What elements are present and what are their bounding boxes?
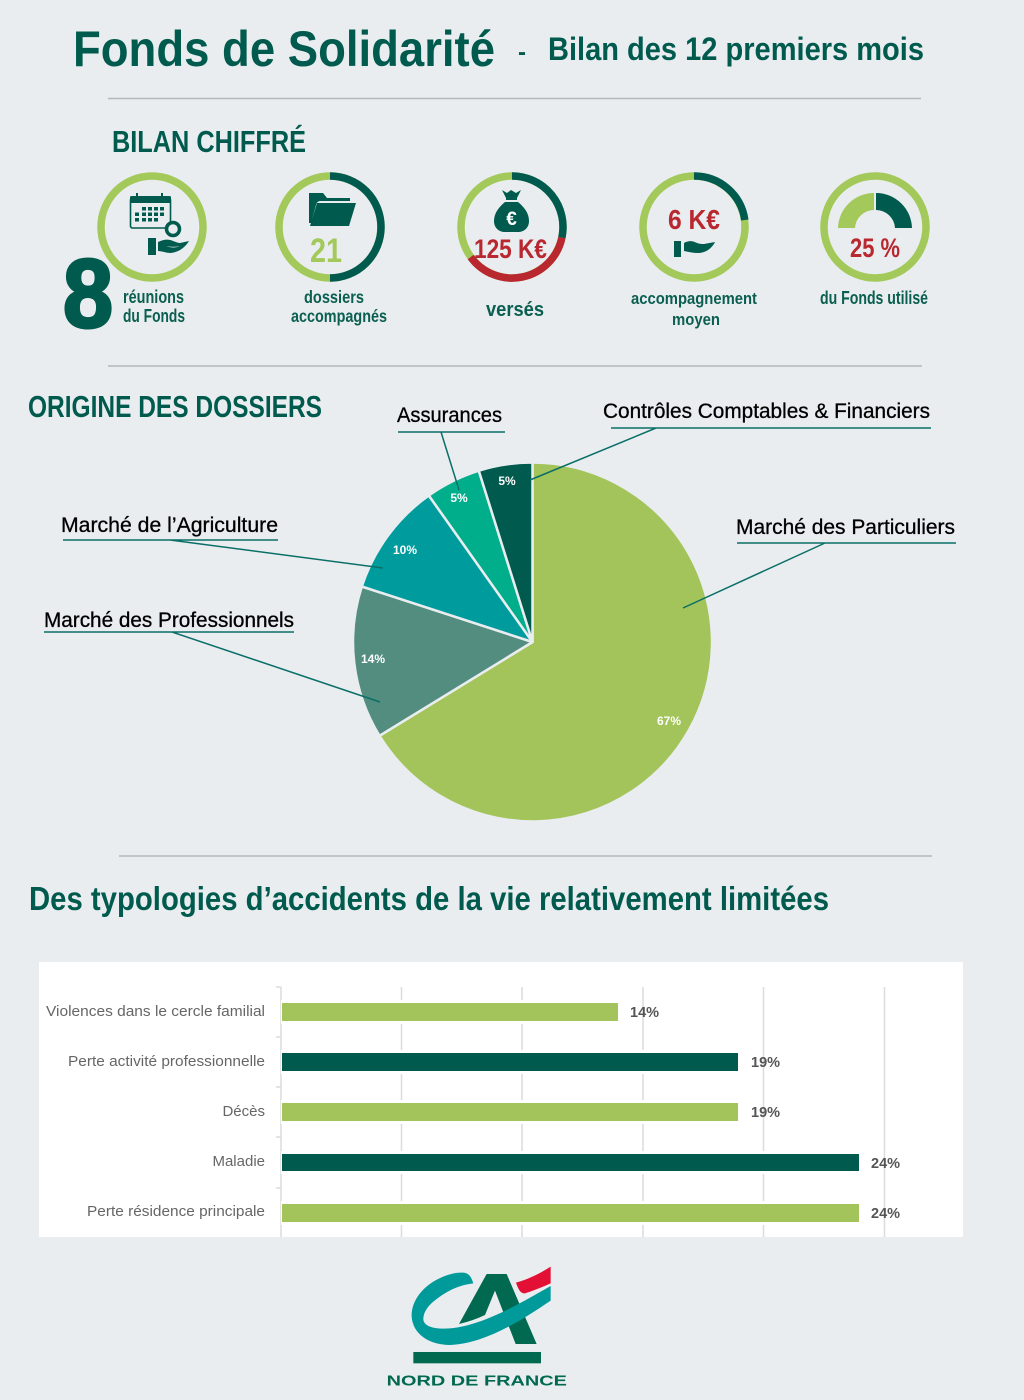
title: Fonds de Solidarité — [73, 21, 495, 77]
logo swoosh — [412, 1273, 551, 1345]
ring: réunions — [101, 176, 203, 278]
slice: agriculture 10% — [362, 496, 532, 642]
stat: 6 K€ accompagnement moyen — [631, 176, 757, 329]
ring: dossiers — [279, 176, 381, 278]
slice: contrôles 5% — [479, 462, 532, 642]
pie percentage labels: 5% — [450, 491, 468, 505]
label: réunions du Fonds: réunions — [123, 287, 184, 307]
icon: money bag — [494, 190, 529, 232]
pie chart: origine des dossiers — [353, 462, 712, 822]
pie percentage labels: 14% — [361, 652, 385, 666]
icon: money bag: € — [506, 209, 517, 230]
row: perte résidence: 24% — [871, 1206, 900, 1222]
chart panel — [39, 962, 963, 1237]
row: perte résidence: Perte résidence principale — [87, 1203, 265, 1220]
stat: 125 K€ versés — [461, 176, 563, 321]
row: maladie: Maladie — [212, 1153, 265, 1170]
row: violences — [46, 1000, 659, 1024]
callout: agriculture — [61, 514, 383, 568]
heading: origine des dossiers: ORIGINE DES DOSSIERS — [28, 389, 322, 424]
label: du Fonds utilisé: du Fonds utilisé — [820, 288, 928, 308]
slice: assurances 5% — [429, 471, 532, 642]
bar chart: typologies d'accidents — [39, 962, 963, 1237]
heading: bilan chiffré: BILAN CHIFFRÉ — [112, 124, 306, 159]
row: perte résidence — [87, 1201, 900, 1225]
label: réunions du Fonds: du Fonds — [123, 306, 185, 326]
callout: particuliers — [683, 516, 956, 608]
logo: Crédit Agricole Nord de France — [387, 1267, 567, 1390]
callout: assurances — [397, 404, 505, 490]
row: perte activité: Perte activité professionnelle — [68, 1053, 265, 1070]
logo bar — [413, 1352, 541, 1363]
label: accompagnement moyen: moyen — [672, 311, 720, 329]
callout: professionnels: Marché des Professionnels — [44, 609, 294, 632]
row: maladie — [212, 1151, 900, 1174]
row: violences: 14% — [630, 1005, 659, 1021]
value 6 K€: 6 K€ — [668, 204, 720, 235]
icon: hand — [674, 241, 715, 257]
pie percentage labels — [361, 474, 681, 728]
label: dossiers accompagnés: dossiers — [304, 287, 364, 307]
callout: particuliers: Marché des Particuliers — [736, 516, 955, 539]
label: accompagnement moyen: accompagnement — [631, 290, 757, 308]
row: décès: Décès — [222, 1103, 265, 1120]
stat: 21 dossiers — [279, 176, 387, 326]
callout: assurances: Assurances — [397, 404, 502, 427]
row: perte activité — [68, 1050, 780, 1074]
label: dossiers accompagnés: accompagnés — [291, 306, 387, 326]
icon: folder — [309, 193, 356, 226]
label: versés: versés — [486, 298, 544, 321]
callout: contrôles comptables et financiers — [530, 400, 931, 480]
row: décès — [222, 1100, 780, 1124]
heading: typologies: Des typologies d’accidents de la vie relativement limitées — [29, 880, 829, 917]
subtitle: Bilan des 12 premiers mois — [548, 31, 924, 67]
big number 8: 8 — [63, 239, 113, 348]
callout: agriculture: Marché de l’Agriculture — [61, 514, 278, 537]
value 125 K€: 125 K€ — [474, 234, 547, 264]
icon: calendar and hand — [130, 193, 189, 255]
logo letter A — [459, 1274, 537, 1344]
row: maladie: 24% — [871, 1156, 900, 1172]
row: décès: 19% — [751, 1105, 780, 1121]
ring: accompagnement — [643, 176, 745, 278]
stat: 8 réunions du Fonds — [63, 176, 203, 348]
ring: versés — [461, 176, 563, 278]
stat: 25 % du Fonds utilisé — [820, 176, 928, 308]
pie percentage labels: 10% — [393, 543, 417, 557]
number 21: 21 — [310, 232, 342, 270]
callout: contrôles comptables et financiers: Contrôles Comptables & Financiers — [603, 400, 930, 423]
row: violences: Violences dans le cercle familial — [46, 1003, 265, 1020]
pie percentage labels: 5% — [498, 474, 516, 488]
slice: professionnels 14% — [353, 586, 532, 736]
subtitle: - — [518, 39, 526, 66]
value 25 %: 25 % — [850, 233, 900, 263]
row: perte activité: 19% — [751, 1055, 780, 1071]
pie percentage labels: 67% — [657, 714, 681, 728]
logo red accent — [516, 1267, 551, 1293]
callout: professionnels — [44, 609, 380, 702]
logo text: NORD DE FRANCE — [387, 1373, 567, 1390]
ring: fonds utilisé — [824, 176, 926, 278]
slice: particuliers 67% — [380, 462, 712, 822]
gauge: half donut — [838, 193, 912, 228]
